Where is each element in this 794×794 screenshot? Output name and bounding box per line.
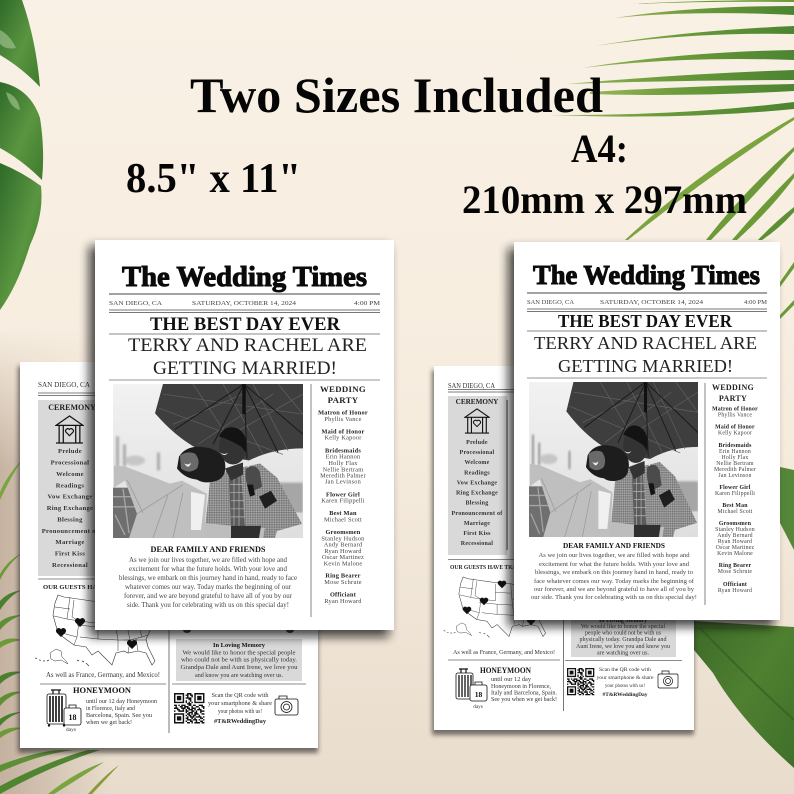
letter heading: DEAR FAMILY AND FRIENDS bbox=[150, 545, 266, 554]
letter body: whatever comes our way. Today marks the beginning of our bbox=[125, 583, 292, 591]
honeymoon text: Italy and Barcelona, Spain. bbox=[491, 690, 557, 696]
wedding party list: Ryan Howard bbox=[718, 588, 752, 594]
letter body: As we join our lives together, we are filled with hope and bbox=[538, 552, 690, 559]
ceremony panel: Readings bbox=[464, 470, 490, 476]
wedding party list: Stanley Hudson bbox=[321, 535, 365, 542]
ceremony panel bbox=[448, 396, 508, 555]
wedding party list: Erin Hannon bbox=[326, 454, 361, 461]
wedding party list: Michael Scott bbox=[324, 517, 362, 524]
wedding party list: Stanley Hudson bbox=[715, 527, 755, 533]
background bbox=[0, 348, 794, 794]
wedding party list: Michael Scott bbox=[718, 509, 753, 515]
wedding party list: Holly Flax bbox=[722, 455, 748, 461]
panel: in loving memory: In Loving Memory bbox=[213, 642, 266, 649]
panel: front page letter bbox=[89, 240, 394, 637]
wedding party list: Officiant bbox=[330, 592, 357, 599]
dateline: SATURDAY, OCTOBER 14, 2024 bbox=[192, 300, 297, 307]
wedding party list: Officiant bbox=[723, 582, 747, 588]
location: SAN DIEGO, CA bbox=[448, 382, 495, 390]
wedding party list: Mose Schrute bbox=[324, 579, 362, 586]
qr caption bbox=[208, 692, 272, 725]
letter body: our side. Thank you for celebrating with us on this special day! bbox=[531, 594, 697, 601]
icon: camera bbox=[275, 696, 298, 715]
headline: THE BEST DAY EVER bbox=[150, 314, 340, 335]
panel: in loving memory: and know you are watching over us. bbox=[195, 672, 283, 679]
panel: in loving memory: are watching over us. bbox=[597, 650, 649, 656]
photo: couple under umbrella bbox=[529, 382, 698, 537]
ceremony panel: Recessional bbox=[52, 562, 88, 569]
dateline: SATURDAY, OCTOBER 14, 2024 bbox=[600, 299, 703, 306]
wedding party list bbox=[712, 383, 758, 594]
panel: in loving memory: who could not be with us physically today. bbox=[181, 656, 297, 664]
wedding party list: Ryan Howard bbox=[324, 598, 362, 605]
wedding party list: Kelly Kapoor bbox=[324, 435, 362, 442]
travel note: As well as France, Germany, and Mexico! bbox=[453, 649, 555, 656]
wedding party list: Karen Filippelli bbox=[321, 498, 365, 505]
honeymoon text bbox=[86, 698, 157, 726]
ornaments bbox=[183, 630, 294, 633]
qr caption: #T&RWeddingDay bbox=[602, 692, 648, 698]
dateline bbox=[527, 299, 768, 306]
icon: camera bbox=[658, 671, 678, 688]
wedding party list: Andy Bernard bbox=[717, 533, 753, 539]
wedding party list: Kelly Kapoor bbox=[718, 430, 752, 436]
dateline: SAN DIEGO, CA bbox=[527, 299, 575, 306]
wedding party list: WEDDING bbox=[320, 384, 366, 394]
panel: back page A4 bbox=[432, 366, 694, 735]
ceremony panel: Welcome bbox=[464, 460, 490, 466]
icon: suitcases: 18 bbox=[475, 690, 482, 699]
panel: in loving memory bbox=[176, 639, 302, 681]
wedding party list: WEDDING bbox=[712, 383, 754, 392]
label: A4: A4: bbox=[571, 126, 628, 171]
ceremony panel: Pronouncement of bbox=[42, 528, 99, 535]
monstera leaf top left bbox=[0, 0, 43, 310]
wedding party list: Matron of Honor bbox=[712, 406, 758, 412]
qr caption: Scan the QR code with bbox=[212, 692, 269, 699]
letter body: As we join our lives together, we are filled with hope and bbox=[129, 556, 287, 564]
wedding party list: Matron of Honor bbox=[318, 410, 368, 417]
honeymoon text: when we get back! bbox=[86, 719, 132, 726]
wedding party list: Ryan Howard bbox=[718, 539, 752, 545]
ceremony panel: Recessional bbox=[461, 541, 493, 547]
wedding party list: Bridesmaids bbox=[718, 443, 752, 449]
wedding party list: PARTY bbox=[328, 395, 359, 405]
palm fronds bottom left bbox=[0, 750, 119, 794]
letter body: excitement for what the future holds. With your love and bbox=[129, 565, 287, 573]
panel: in loving memory: Aunt Irene, we love you and know you bbox=[576, 644, 670, 650]
ceremony panel: Blessing bbox=[465, 500, 489, 506]
letter body: excitement for what the future holds. With your love and bbox=[539, 561, 690, 568]
qr code bbox=[174, 694, 204, 723]
wedding party list: Nellie Bertram bbox=[716, 461, 754, 467]
panel: back page letter bbox=[18, 362, 318, 753]
wedding party list: Jan Levinson bbox=[718, 473, 752, 479]
travel note: As well as France, Germany, and Mexico! bbox=[46, 672, 160, 679]
letter body: face whatever comes our way. Today marks the beginning of bbox=[534, 578, 695, 585]
icon: suitcases bbox=[456, 669, 487, 710]
dateline: SAN DIEGO, CA bbox=[109, 300, 162, 307]
label: A4 dimensions: 210mm x 297mm bbox=[462, 177, 747, 222]
panel: front page A4 bbox=[508, 242, 780, 627]
qr caption bbox=[596, 667, 654, 698]
letter body bbox=[531, 552, 697, 601]
ceremony panel: First Kiss bbox=[55, 550, 85, 558]
qr caption: your photos with us! bbox=[218, 708, 262, 715]
letter heading: DEAR FAMILY AND FRIENDS bbox=[563, 541, 665, 550]
wedding party list: Karen Filippelli bbox=[715, 491, 755, 497]
wedding party list: Oscar Martinez bbox=[322, 554, 364, 561]
qr caption: #T&RWeddingDay bbox=[214, 718, 267, 725]
wedding party list: Flower Girl bbox=[719, 485, 751, 491]
ceremony panel: Ring Exchange bbox=[456, 490, 498, 496]
ceremony panel: Pronouncement of bbox=[451, 511, 503, 517]
heading: Two Sizes Included bbox=[190, 67, 603, 123]
panel: in loving memory: Grandpa Dale and Aunt Irene, we love you bbox=[180, 664, 298, 671]
wedding party list: Best Man bbox=[722, 503, 748, 509]
ceremony panel: First Kiss bbox=[463, 531, 491, 537]
wedding party list: Phyllis Vance bbox=[324, 416, 362, 423]
guests heading: OUR GUESTS HAVE TRAVELED bbox=[43, 584, 143, 591]
wedding party list: Oscar Martinez bbox=[716, 545, 755, 551]
panel: in loving memory: physically today. Grandpa Dale and bbox=[580, 637, 666, 643]
wedding party list: Groomsmen bbox=[325, 529, 361, 536]
honeymoon text: until our 12 day bbox=[491, 677, 531, 683]
wedding party list: Kevin Malone bbox=[324, 560, 362, 567]
letter body: forever, and we are beyond grateful to have all of you by our bbox=[124, 592, 293, 600]
honeymoon text: Barcelona, Spain. See you bbox=[86, 712, 152, 719]
letter body: blessings, we embark on this journey hand in hand, ready to face bbox=[119, 574, 297, 582]
letter body: our forever, and we are beyond grateful to have all of you by bbox=[534, 586, 695, 593]
icon: suitcases: days bbox=[66, 727, 76, 733]
ceremony panel bbox=[38, 400, 108, 576]
panel: in loving memory: people who could not be with us bbox=[585, 630, 662, 636]
palm fronds top right bbox=[549, 0, 794, 319]
wedding party list: Bridesmaids bbox=[325, 447, 361, 454]
ceremony panel: Readings bbox=[56, 482, 84, 490]
wedding party list bbox=[318, 384, 368, 605]
wedding party list: Holly Flax bbox=[328, 460, 358, 467]
wedding party list: Groomsmen bbox=[719, 521, 752, 527]
wedding party list: Best Man bbox=[329, 510, 357, 517]
wedding party list: Meredith Palmer bbox=[714, 467, 756, 473]
wedding party list: Meredith Palmer bbox=[320, 473, 367, 480]
ceremony panel: Processional bbox=[460, 450, 495, 456]
ceremony panel: Vow Exchange bbox=[48, 494, 92, 500]
ceremony panel: Prelude bbox=[58, 448, 82, 455]
letter body bbox=[119, 556, 297, 609]
wedding party list: Maid of Honor bbox=[321, 428, 365, 435]
wedding party list: Andy Bernard bbox=[324, 542, 363, 549]
masthead: The Wedding Times bbox=[533, 260, 760, 290]
ceremony panel: Marriage bbox=[464, 521, 490, 527]
subheadline: GETTING MARRIED! bbox=[558, 356, 733, 376]
subheadline: TERRY AND RACHEL ARE bbox=[128, 335, 367, 356]
wedding party list: Ring Bearer bbox=[325, 573, 361, 580]
photo: couple under umbrella bbox=[113, 384, 303, 538]
qr caption: your photos with us! bbox=[605, 683, 645, 689]
honeymoon text: until our 12 day Honeymoon bbox=[86, 698, 157, 705]
wedding party list: Jan Levinson bbox=[325, 479, 362, 486]
honeymoon text: See you when we get back! bbox=[491, 697, 557, 703]
ceremony panel: Vow Exchange bbox=[457, 480, 497, 486]
dateline bbox=[109, 300, 380, 307]
headline: THE BEST DAY EVER bbox=[558, 311, 733, 331]
palm fronds left bbox=[0, 460, 22, 738]
ceremony panel: Welcome bbox=[56, 471, 84, 478]
icon: suitcases bbox=[47, 690, 81, 733]
label: letter size: 8.5" x 11" bbox=[126, 156, 301, 202]
qr caption: your smartphone & share bbox=[208, 700, 272, 707]
wedding party list: Erin Hannon bbox=[719, 449, 751, 455]
wedding party list: PARTY bbox=[719, 394, 747, 403]
ceremony panel: Marriage bbox=[55, 539, 85, 546]
wedding party list: Phyllis Vance bbox=[718, 412, 752, 418]
ceremony panel: CEREMONY bbox=[456, 398, 499, 406]
panel: in loving memory bbox=[571, 618, 676, 657]
icon: suitcases: 18 bbox=[68, 713, 76, 722]
panel: in loving memory: We would like to honor the special people bbox=[182, 650, 296, 656]
letter body: blessings, we embark on this journey hand in hand, ready to bbox=[535, 569, 693, 576]
ceremony panel: Blessing bbox=[57, 516, 83, 524]
guests heading: OUR GUESTS HAVE TRAVELED bbox=[450, 565, 536, 571]
subheadline: GETTING MARRIED! bbox=[153, 358, 337, 379]
panel: in loving memory: We would like to honor the special bbox=[581, 624, 665, 630]
ceremony panel: CEREMONY bbox=[48, 403, 96, 412]
ceremony panel: Processional bbox=[51, 460, 89, 466]
map of guests bbox=[35, 595, 157, 666]
honeymoon text: in Florence, Italy and bbox=[86, 705, 136, 712]
subheadline: TERRY AND RACHEL ARE bbox=[534, 333, 757, 353]
large leaf bottom right bbox=[694, 467, 794, 768]
honeymoon heading: HONEYMOON bbox=[480, 666, 531, 675]
wedding party list: Maid of Honor bbox=[715, 424, 755, 430]
wedding party list: Flower Girl bbox=[326, 491, 360, 498]
qr caption: your smartphone & share bbox=[596, 675, 654, 681]
honeymoon heading: HONEYMOON bbox=[73, 685, 132, 695]
map of guests bbox=[444, 577, 547, 637]
wedding party list: Ryan Howard bbox=[324, 548, 362, 555]
honeymoon text bbox=[491, 677, 557, 703]
wedding party list: Nellie Bertram bbox=[323, 466, 363, 473]
subheadline bbox=[534, 333, 757, 376]
dateline: 4:00 PM bbox=[744, 299, 768, 306]
wedding party list: Kevin Malone bbox=[717, 551, 753, 557]
location: SAN DIEGO, CA bbox=[38, 380, 90, 389]
qr caption: Scan the QR code with bbox=[599, 667, 651, 673]
wedding party list: Ring Bearer bbox=[719, 563, 751, 569]
masthead: The Wedding Times bbox=[122, 261, 367, 293]
dateline: 4:00 PM bbox=[354, 300, 380, 307]
wedding party list: Mose Schrute bbox=[718, 569, 752, 575]
letter body: side. Thank you for celebrating with us on this special day! bbox=[127, 601, 289, 609]
honeymoon text: Honeymoon in Florence, bbox=[491, 684, 551, 690]
icon: suitcases: days bbox=[473, 704, 483, 710]
subheadline bbox=[128, 335, 367, 379]
ceremony panel: Prelude bbox=[466, 440, 488, 446]
ceremony panel: Ring Exchange bbox=[47, 505, 93, 512]
panel: in loving memory: In Loving Memory bbox=[599, 618, 647, 624]
qr code bbox=[567, 669, 594, 695]
